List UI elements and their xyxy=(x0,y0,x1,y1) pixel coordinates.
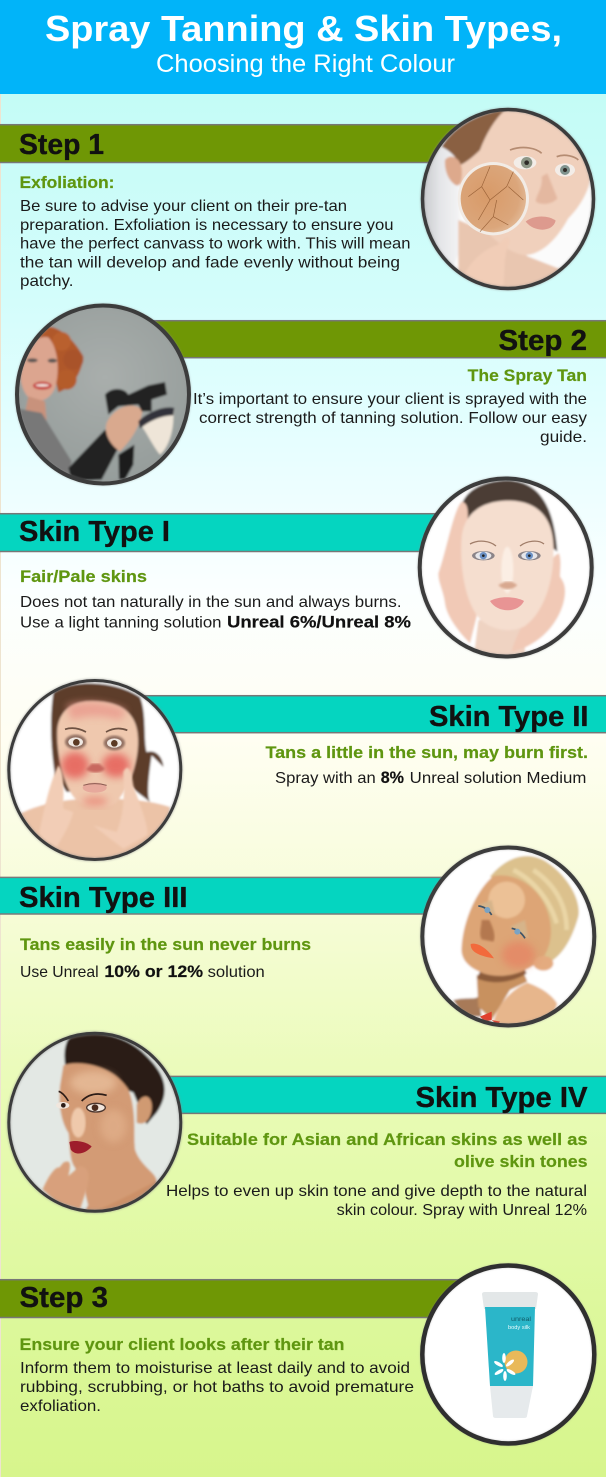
skin type IV subheading xyxy=(187,1130,588,1171)
header banner xyxy=(0,0,606,94)
panel: step 2 xyxy=(14,302,606,486)
skin type IV body text: Helps to even up skin tone and give depth to the natural xyxy=(166,1183,587,1200)
photo: woman with sunburned skin xyxy=(6,678,184,862)
step 1 subheading: Exfoliation: xyxy=(20,173,114,192)
skin type II body text: Unreal solution Medium xyxy=(410,770,586,787)
skin type III body text: solution xyxy=(208,964,265,981)
step 3 body text: rubbing, scrubbing, or hot baths to avoid premature xyxy=(20,1379,414,1396)
step 2 subheading: The Spray Tan xyxy=(468,366,587,385)
photo: unreal body silk tube: body silk xyxy=(508,1325,530,1331)
subtitle: Choosing the Right Colour xyxy=(156,50,455,78)
skin type IV body text xyxy=(166,1183,587,1219)
step 2 heading: Step 2 xyxy=(498,325,587,357)
skin type I bar xyxy=(0,514,478,552)
left edge stripe xyxy=(0,94,1,1477)
skin type I body text: Does not tan naturally in the sun and always burns. xyxy=(20,594,402,611)
skin type IV subheading: olive skin tones xyxy=(454,1152,588,1171)
skin type III subheading: Tans easily in the sun never burns xyxy=(20,935,311,954)
skin type IV body text: skin colour. Spray with Unreal 12% xyxy=(337,1202,587,1219)
photo: woman with olive skin xyxy=(6,1030,184,1214)
skin type III body text: 10% or 12% xyxy=(104,962,203,981)
skin type IV subheading: Suitable for Asian and African skins as well as xyxy=(187,1130,588,1149)
skin type I body text: Unreal 6%/Unreal 8% xyxy=(227,612,411,632)
step 2 body text: correct strength of tanning solution. Follow our easy xyxy=(199,410,587,427)
skin type I subheading: Fair/Pale skins xyxy=(20,567,147,586)
panel: skin type III xyxy=(0,844,598,1028)
photo: blonde woman with medium tan xyxy=(419,844,598,1028)
step 1 heading: Step 1 xyxy=(19,129,104,161)
step 1 body text: patchy. xyxy=(20,273,74,290)
panel: skin type II xyxy=(6,678,606,862)
step 3 subheading: Ensure your client looks after their tan xyxy=(20,1335,345,1354)
step 3 heading: Step 3 xyxy=(20,1282,108,1314)
photo: face with dry cracked skin xyxy=(420,106,596,292)
skin type II body text: Spray with an xyxy=(275,770,376,787)
skin type II subheading: Tans a little in the sun, may burn first. xyxy=(266,743,588,762)
step 1 body text: preparation. Exfoliation is necessary to ensure you xyxy=(20,217,394,234)
skin type III body text: Use Unreal xyxy=(20,964,99,981)
skin type III body text xyxy=(20,962,265,981)
skin type II bar xyxy=(130,696,606,733)
skin type IV bar xyxy=(130,1076,606,1113)
panel: skin type I xyxy=(0,476,595,660)
skin type I body text: Use a light tanning solution xyxy=(20,614,222,632)
step 1 body text: the tan will develop and fade evenly without being xyxy=(20,254,400,272)
skin type IV heading: Skin Type IV xyxy=(416,1082,588,1114)
step 2 body text: It’s important to ensure your client is sprayed with the xyxy=(193,391,587,408)
step 1 body text: Be sure to advise your client on their pre-tan xyxy=(20,198,347,215)
step 3 body text xyxy=(20,1360,414,1415)
panel: step 3 xyxy=(0,1266,594,1444)
skin type I body text xyxy=(20,594,411,632)
skin type III heading: Skin Type III xyxy=(19,882,188,914)
skin type II heading: Skin Type II xyxy=(429,701,588,733)
step 2 body text xyxy=(193,391,587,446)
step 2 bar xyxy=(130,321,606,358)
panel: step 1 xyxy=(0,106,596,292)
step 3 body text: exfoliation. xyxy=(20,1398,101,1415)
skin type II body text xyxy=(275,768,586,787)
skin type II body text: 8% xyxy=(381,768,404,787)
photo: woman holding spray gun xyxy=(14,302,192,486)
skin type I heading: Skin Type I xyxy=(19,516,170,548)
photo: unreal body silk tube: unreal xyxy=(511,1317,531,1323)
photo: unreal body silk tube xyxy=(422,1266,594,1444)
step 1 bar xyxy=(0,125,478,162)
step 3 bar xyxy=(0,1280,478,1318)
title: Spray Tanning & Skin Types, xyxy=(45,8,562,49)
step 1 body text: have the perfect canvass to work with. This will mean xyxy=(20,236,410,252)
step 3 body text: Inform them to moisturise at least daily and to avoid xyxy=(20,1360,410,1377)
step 2 body text: guide. xyxy=(540,429,587,446)
skin type III bar xyxy=(0,877,478,914)
step 1 body text xyxy=(20,198,410,290)
photo: woman with fair skin xyxy=(416,476,595,660)
panel: skin type IV xyxy=(0,1023,606,1229)
